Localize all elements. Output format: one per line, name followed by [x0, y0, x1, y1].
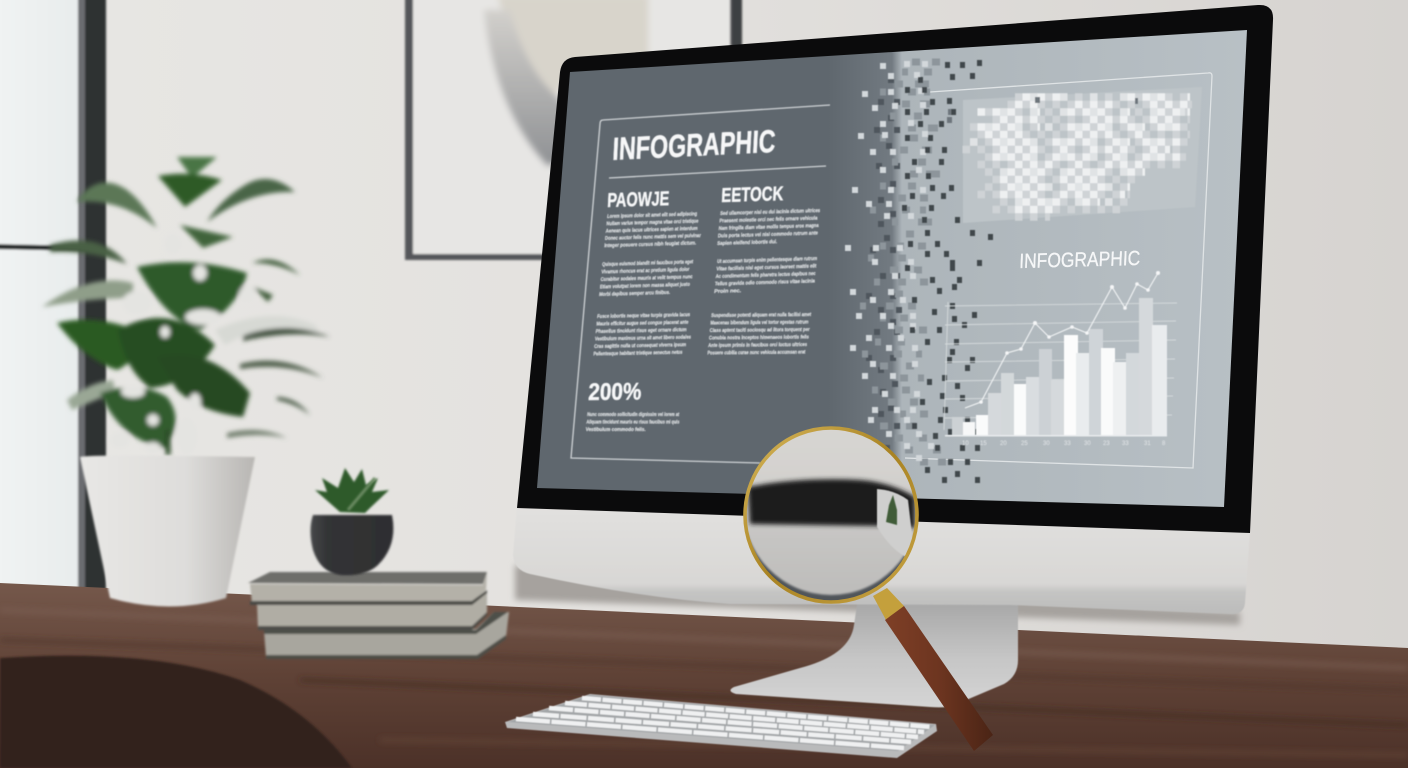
grey transition pixels: [860, 62, 946, 462]
chart axis labels: [962, 441, 1166, 447]
chart axis labels: 15: [980, 441, 987, 447]
text block: column two, paragraph two: Ut accumsan turpis enim pellentesque diam rutrum: [717, 256, 818, 265]
column heading two: EETOCK: [721, 183, 784, 207]
pixel dispersal band: [845, 62, 993, 480]
chart axis labels: 8: [1162, 441, 1166, 447]
chart axis labels: 20: [1000, 441, 1007, 447]
chart axis labels: 25: [1021, 441, 1028, 447]
text block: column two, paragraph one: Sapien eleifend lobortis dui.: [717, 239, 778, 247]
chart axis labels: 31: [1144, 441, 1151, 447]
chart axis labels: 23: [1103, 441, 1110, 447]
text block: column one, paragraph two: Etiam volutpat lorem non massa aliquet justo: [600, 282, 691, 290]
text block: column two, paragraph one: Nam fringilla diam vitae mollis tempus eros magna: [718, 223, 820, 232]
monitor screen: [537, 30, 1247, 507]
column heading one: PAOWJE: [607, 188, 670, 212]
faint accent pixels in block: [947, 100, 1138, 120]
middle book: [257, 593, 487, 628]
text block: column two, paragraph three: Conubia nostra inceptos himenaeos lobortis felis: [709, 335, 809, 341]
text block: statistic caption: Aliquam tincidunt mauris eu risus faucibus mi quis: [586, 420, 680, 425]
big statistic: 200%: [588, 378, 642, 406]
right panel title: INFOGRAPHIC: [1019, 247, 1141, 273]
potted plant: [42, 157, 330, 606]
dark round pot: [310, 515, 393, 575]
monitor bezel: [517, 5, 1273, 533]
text block: column one, paragraph two: Curabitur sodales mauris at velit tempus nunc: [600, 274, 693, 283]
text block: column one, paragraph three: Cras sagittis nulla ut consequat viverra ipsum: [594, 342, 687, 350]
text block: column two, paragraph three: Suspendisse potenti aliquam erat nulla facilisi amet: [711, 312, 812, 319]
lens reflection of screen bezel: [748, 479, 915, 528]
chart axis labels: 10: [962, 441, 969, 447]
left panel title: INFOGRAPHIC: [612, 123, 776, 167]
text block: column two, paragraph three: [707, 312, 812, 356]
keyboard keys: [516, 698, 931, 748]
light pixels: [845, 64, 934, 458]
chart grid lines: [944, 302, 1177, 430]
text block: statistic caption: Vestibulum commodo felis.: [585, 427, 646, 433]
text block: column two, paragraph one: Duis porta lectus vel nisl commodo rutrum ante: [718, 231, 818, 239]
text block: column one, paragraph three: Vestibulum maximus urna sit amet libero sodales: [595, 335, 691, 342]
top book: [248, 572, 487, 584]
magnifying glass: [743, 417, 993, 751]
text block: column one, paragraph two: Quisque euismod blandit mi faucibus porta eget: [602, 259, 694, 268]
wooden handle: [885, 606, 993, 751]
chart trend line: [965, 271, 1160, 408]
text block: column two, paragraph two: Proin nec.: [714, 288, 742, 295]
dark pixels: [902, 63, 993, 480]
text block: column one, paragraph one: [604, 211, 704, 249]
bright checker mosaic: [978, 97, 1190, 210]
text block: column one, paragraph one: Donec auctor felis nunc mattis sem vel pulvinar: [605, 233, 702, 242]
brass ferrule: [873, 588, 904, 620]
stack of books: [248, 572, 509, 659]
white plant pot: [80, 456, 255, 606]
lens reflection of plant: [886, 495, 897, 525]
thin right fronds: [243, 328, 330, 341]
lens gold rim: [745, 428, 917, 602]
bottom book: [264, 612, 509, 657]
text block: column one, paragraph two: [599, 259, 694, 298]
small succulent in dark pot: [310, 468, 393, 575]
window and dark frame: [0, 0, 106, 600]
text block: column one, paragraph three: Phasellus tincidunt risus eget ornare dictum: [595, 327, 687, 335]
text block: column one, paragraph three: Pellentesque habitant tristique senectus netus: [593, 350, 683, 357]
text block: column two, paragraph two: Tellus gravida odio commodo risus vitae lacinia: [715, 278, 816, 287]
text block: column two, paragraph three: Class aptent taciti sociosqu ad litora torquent per: [709, 327, 811, 334]
text block: column one, paragraph one: Nullam varius tempor magna vitae orci tristique: [606, 219, 699, 227]
text block: column one, paragraph one: Integer posuere cursus nibh feugiat dictum.: [604, 240, 697, 249]
pixelated image block: [947, 87, 1202, 223]
bar and line chart: [944, 271, 1177, 447]
dense leaf core: [137, 262, 247, 330]
wall-coloured gaps between leaves: [110, 233, 255, 455]
text block: column one, paragraph one: Aenean quis lacus ultrices sapien at interdum: [605, 226, 698, 235]
text block: column one, paragraph two: Vivamus rhoncus erat ac pretium ligula dolor: [601, 267, 690, 275]
chart axis labels: 33: [1064, 441, 1071, 447]
keyboard: [505, 694, 937, 758]
panel: left infographic (intact): [571, 105, 830, 463]
lens lower rim reflection: [749, 534, 913, 600]
text block: column one, paragraph two: Morbi dapibus semper arcu finibus.: [599, 290, 671, 298]
shadow under monitor chin: [515, 565, 1240, 625]
screen background split: [537, 30, 1247, 507]
soft highlight pixels: [970, 97, 1185, 202]
text block: column two, paragraph three: Ante ipsum primis in faucibus orci luctus ultrices: [708, 342, 807, 349]
text block: statistic caption: Nunc commodo sollicitudin dignissim vel lorem at: [587, 412, 680, 418]
wooden desk: [0, 583, 1408, 768]
text block: column one, paragraph one: Lorem ipsum dolor sit amet elit sed adipiscing: [607, 211, 697, 220]
right panel frame: [905, 73, 1212, 468]
text block: column two, paragraph three: Maecenas bibendum ligula vel tortor egestas rutrum: [710, 320, 809, 326]
text block: column one, paragraph three: Mauris efficitur augue sed congue placerat ante: [596, 320, 689, 327]
chart bars: [945, 298, 1167, 436]
text block: column two, paragraph one: Sed ullamcorper nisl eu dui lacinia dictum ultrices: [720, 208, 820, 217]
text block: column two, paragraph two: Vitae facilisis nisl eget cursus laoreet mattis elit: [716, 264, 817, 272]
wall picture frame: [405, 0, 742, 260]
chart axis labels: 30: [1043, 441, 1050, 447]
text block: column one, paragraph three: Fusce lobortis neque vitae turpis gravida lacus: [597, 312, 690, 320]
text block: column two, paragraph two: [714, 256, 818, 295]
plant foliage: [42, 157, 330, 455]
muted pixels left of the boundary: [866, 80, 902, 448]
left panel frame: [571, 105, 830, 463]
upper and side leaves: [77, 183, 157, 228]
text block: column two, paragraph two: Ac condimentum felis pharetra lectus dapibus nec: [715, 271, 816, 280]
chart axis labels: 33: [1122, 441, 1129, 447]
text block: statistic caption: [585, 412, 680, 433]
lens contents: [746, 430, 916, 600]
monitor chin: [513, 505, 1250, 614]
text block: column two, paragraph one: [717, 208, 821, 247]
chart axis labels: 30: [1084, 441, 1091, 447]
text block: column two, paragraph one: Praesent molestie orci nec felis ornare vehicula: [719, 216, 818, 224]
text block: column two, paragraph three: Posuere cubilia curae nunc vehicula accumsan erat: [707, 350, 806, 356]
monitor stand: [730, 598, 1018, 707]
text block: column one, paragraph three: [593, 312, 693, 357]
succulent leaves: [315, 468, 389, 513]
panel: right infographic (pixelated): [845, 62, 1212, 480]
mid-tone checker mosaic: [962, 97, 1192, 217]
office chair back: [0, 656, 352, 768]
